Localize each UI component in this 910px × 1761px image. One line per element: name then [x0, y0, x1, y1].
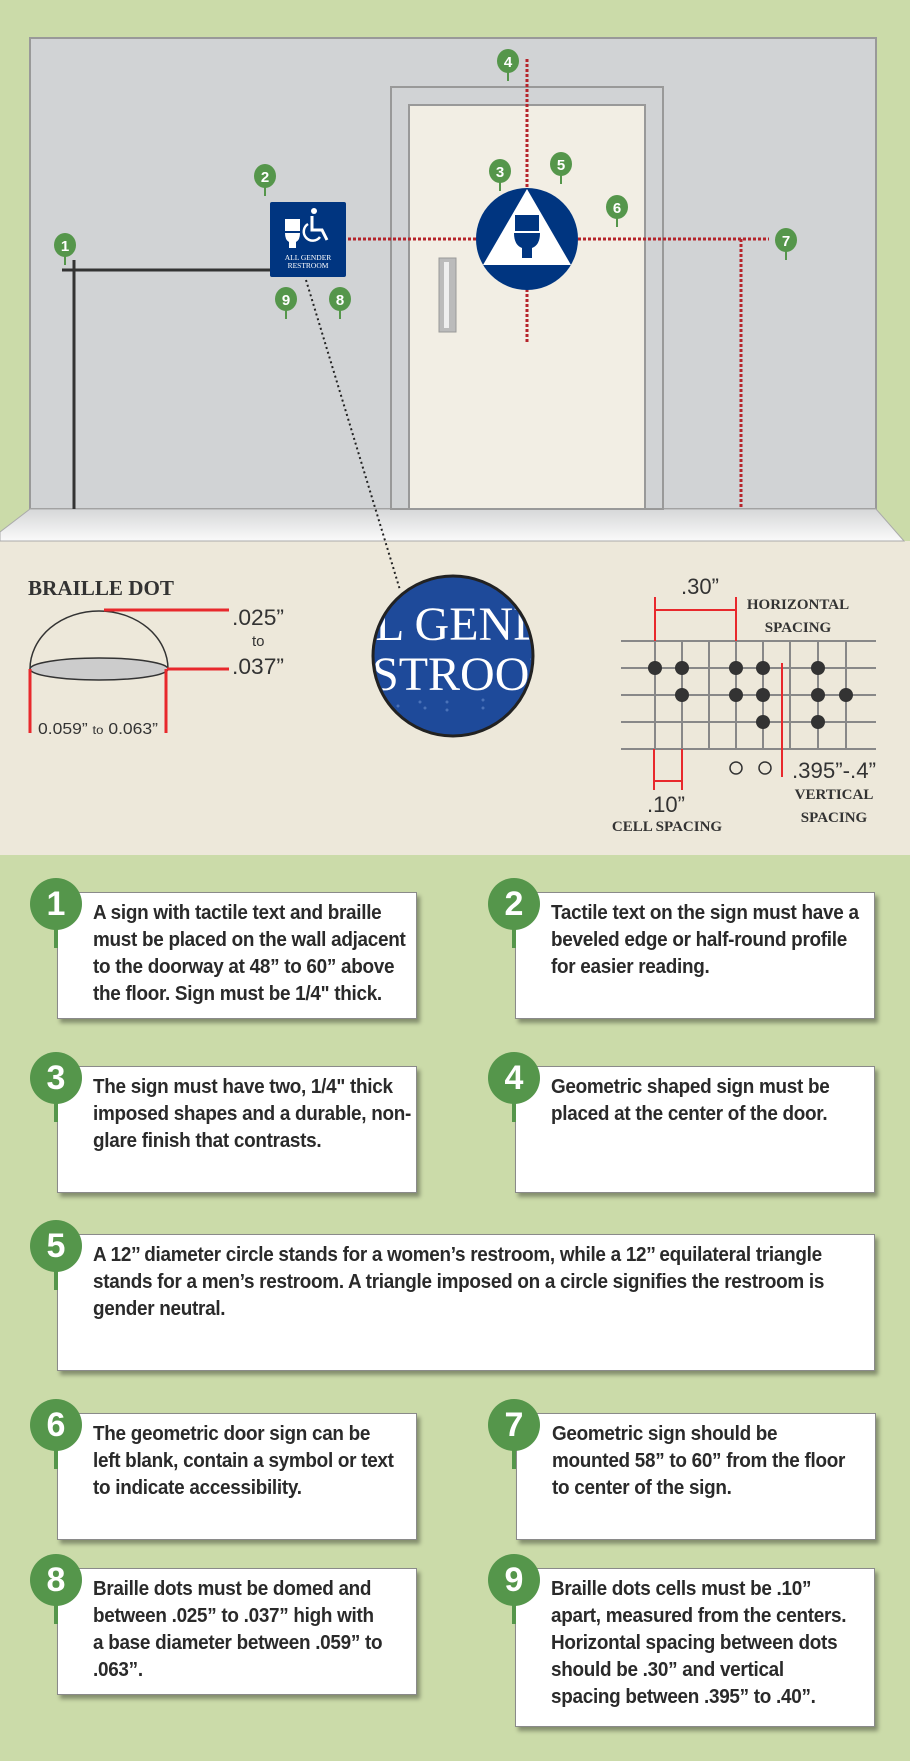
beige panel: [0, 541, 910, 855]
braille spacing grid: .10”: [647, 792, 685, 817]
badge 9: [488, 1554, 540, 1624]
braille dot diagram: [28, 576, 284, 738]
box 1: A sign with tactile text and braille: [93, 902, 381, 924]
box 4: Geometric shaped sign must be: [551, 1076, 830, 1098]
braille spacing grid: .395”-.4”: [792, 758, 876, 783]
dotted connector to magnifier: [306, 280, 400, 590]
badge 6: 6: [47, 1406, 65, 1444]
box 8: Braille dots must be domed and: [93, 1578, 371, 1600]
badge 6: [30, 1399, 82, 1469]
box 2: beveled edge or half-round profile: [551, 929, 847, 951]
box 4: placed at the center of the door.: [551, 1103, 827, 1125]
badge 5: 5: [47, 1227, 65, 1265]
box 6: The geometric door sign can be: [93, 1423, 370, 1445]
badge 1: 1: [47, 885, 65, 923]
box 7: [516, 1413, 876, 1540]
box 1: to the doorway at 48” to 60” above: [93, 956, 394, 978]
braille dot diagram: .025”: [232, 605, 284, 630]
scene: wall, door and braille diagrams: [0, 37, 910, 855]
box 5: stands for a men’s restroom. A triangle imposed on a circle signifies the restroom is: [93, 1271, 824, 1293]
badge 8: 8: [47, 1561, 65, 1599]
badge 2: [488, 878, 540, 948]
tactile sign: RESTROOM: [288, 261, 329, 270]
braille spacing grid: HORIZONTAL: [747, 597, 849, 613]
braille dot diagram: BRAILLE DOT: [28, 576, 174, 600]
pins on scene: 8: [336, 292, 344, 309]
badge 7: 7: [505, 1406, 523, 1444]
box 9: Braille dots cells must be .10”: [551, 1578, 811, 1600]
braille spacing grid: VERTICAL: [795, 787, 873, 803]
box 9: [515, 1568, 875, 1727]
tactile sign: [270, 202, 346, 277]
box 1: the floor. Sign must be 1/4" thick.: [93, 983, 382, 1005]
wall: [30, 38, 876, 509]
box 9: apart, measured from the centers.: [551, 1605, 846, 1627]
red dotted guide lines: [348, 59, 769, 509]
tactile sign: ALL GENDER: [285, 253, 331, 262]
magnifier circle: STROOM: [372, 648, 572, 701]
pins on scene: 6: [613, 200, 621, 217]
braille spacing grid: .30”: [681, 574, 719, 599]
box 6: left blank, contain a symbol or text: [93, 1450, 394, 1472]
box 1: [57, 892, 417, 1019]
pins on scene: 3: [496, 164, 504, 181]
magnifier circle: [372, 574, 534, 738]
braille dot diagram: to: [252, 633, 265, 650]
braille spacing grid: CELL SPACING: [612, 819, 722, 835]
badge 2: 2: [505, 885, 523, 923]
badge 9: 9: [505, 1561, 523, 1599]
badge 4: [488, 1052, 540, 1122]
box 6: [57, 1413, 417, 1540]
box 3: [57, 1066, 417, 1193]
box 5: [57, 1234, 875, 1371]
badge 3: [30, 1052, 82, 1122]
badge 8: [30, 1554, 82, 1624]
box 7: mounted 58” to 60” from the floor: [552, 1450, 845, 1472]
pins on scene: 5: [557, 157, 565, 174]
badge 1: [30, 878, 82, 948]
badge 4: 4: [505, 1059, 523, 1097]
box 2: [515, 892, 875, 1019]
geometric door sign: [476, 188, 578, 290]
pins on scene: [54, 49, 797, 319]
pins on scene: 4: [504, 54, 513, 71]
box 9: should be .30” and vertical: [551, 1659, 784, 1681]
box 3: imposed shapes and a durable, non-: [93, 1103, 411, 1125]
box 3: glare finish that contrasts.: [93, 1130, 321, 1152]
magnifier circle: L GENDER: [375, 598, 609, 651]
braille dot diagram: .037”: [232, 654, 284, 679]
pins on scene: 1: [61, 238, 69, 255]
box 5: gender neutral.: [93, 1298, 225, 1320]
pins on scene: 2: [261, 169, 269, 186]
box 7: Geometric sign should be: [552, 1423, 777, 1445]
box 7: to center of the sign.: [552, 1477, 732, 1499]
box 8: [57, 1568, 417, 1695]
box 3: The sign must have two, 1/4" thick: [93, 1076, 393, 1098]
box 4: [515, 1066, 875, 1193]
box 8: between .025” to .037” high with: [93, 1605, 374, 1627]
floor: [0, 509, 904, 541]
badge 5: [30, 1220, 82, 1290]
box 1: must be placed on the wall adjacent: [93, 929, 406, 951]
box 9: spacing between .395” to .40”.: [551, 1686, 816, 1708]
braille dot diagram: 0.059” to 0.063”: [38, 721, 158, 738]
pins on scene: 7: [782, 233, 790, 250]
box 2: for easier reading.: [551, 956, 709, 978]
door: [391, 87, 663, 509]
box 5: A 12’’ diameter circle stands for a women’s restroom, while a 12’’ equilateral triangle: [93, 1244, 822, 1266]
badge 7: [488, 1399, 540, 1469]
box 6: to indicate accessibility.: [93, 1477, 302, 1499]
box 9: Horizontal spacing between dots: [551, 1632, 837, 1654]
braille spacing grid: [612, 574, 876, 835]
braille spacing grid: SPACING: [801, 810, 868, 826]
badge 3: 3: [47, 1059, 65, 1097]
braille spacing grid: SPACING: [765, 620, 832, 636]
box 8: .063”.: [93, 1659, 143, 1681]
box 2: Tactile text on the sign must have a: [551, 902, 859, 924]
height line for sign 1: [62, 260, 270, 509]
box 8: a base diameter between .059” to: [93, 1632, 382, 1654]
pins on scene: 9: [282, 292, 290, 309]
